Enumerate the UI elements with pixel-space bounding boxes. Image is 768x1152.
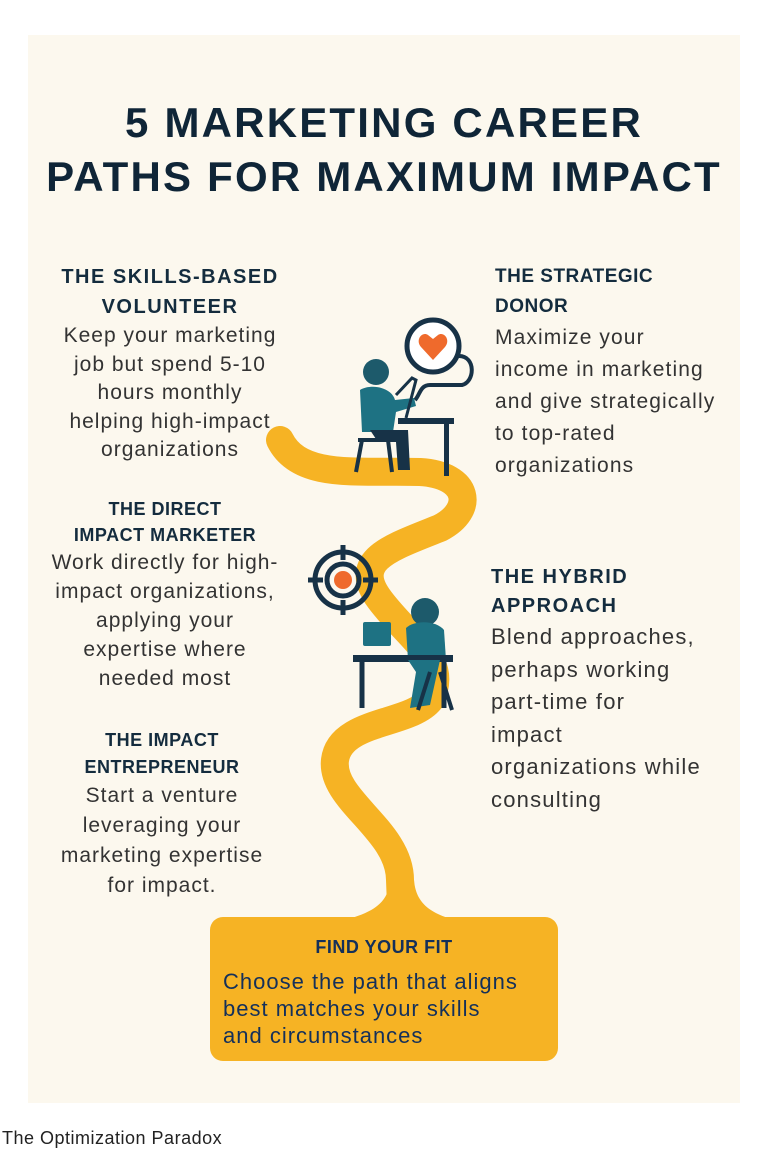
panel: strategic donor: Maximize your — [495, 326, 645, 349]
panel: impact entrepreneur: leveraging your — [83, 814, 241, 837]
panel: impact entrepreneur: for impact. — [107, 874, 217, 897]
winding path — [280, 440, 480, 930]
figure: man at desk — [356, 359, 454, 476]
panel: skills-based volunteer: helping high-impact — [69, 410, 271, 432]
panel: hybrid approach: Blend approaches, — [491, 624, 695, 649]
panel: strategic donor: to top-rated — [495, 422, 616, 445]
panel: hybrid approach: organizations while — [491, 754, 701, 779]
panel: strategic donor: THE STRATEGIC — [495, 266, 653, 287]
callout: find your fit: and circumstances — [223, 1023, 423, 1048]
panel: skills-based volunteer: hours monthly — [98, 381, 242, 404]
panel: direct impact marketer: impact organizations, — [55, 580, 275, 603]
panel: hybrid approach: perhaps working — [491, 656, 670, 682]
panel: strategic donor: organizations — [495, 454, 634, 477]
panel: hybrid approach: THE HYBRID — [491, 566, 628, 588]
panel: skills-based volunteer — [61, 266, 279, 461]
callout: find your fit — [210, 917, 558, 1061]
panel: direct impact marketer: IMPACT MARKETER — [74, 525, 256, 545]
callout: find your fit: Choose the path that aligns — [223, 969, 518, 994]
callout: find your fit: FIND YOUR FIT — [315, 937, 453, 957]
title — [46, 99, 722, 200]
panel: skills-based volunteer: job but spend 5-10 — [74, 352, 266, 376]
panel: strategic donor: income in marketing — [495, 358, 704, 381]
panel: impact entrepreneur: marketing expertise — [61, 844, 263, 867]
icon: heart speech bubble — [407, 320, 472, 400]
panel: hybrid approach: impact — [491, 722, 563, 746]
icon: target — [308, 545, 378, 615]
panel: impact entrepreneur — [61, 730, 263, 897]
panel: strategic donor: DONOR — [495, 296, 568, 317]
title: 5 MARKETING CAREER — [125, 99, 643, 146]
panel: hybrid approach: part-time for — [491, 689, 625, 714]
panel: direct impact marketer: applying your — [96, 609, 234, 632]
panel: direct impact marketer: Work directly for high- — [52, 551, 278, 574]
panel: skills-based volunteer: VOLUNTEER — [102, 296, 238, 318]
panel: hybrid approach: consulting — [491, 786, 602, 812]
panel: direct impact marketer: expertise where — [83, 638, 247, 661]
figure: woman at laptop — [353, 598, 453, 710]
panel: direct impact marketer: needed most — [99, 667, 231, 690]
panel: direct impact marketer: THE DIRECT — [108, 499, 222, 519]
panel: hybrid approach: APPROACH — [491, 595, 617, 617]
panel: skills-based volunteer: Keep your marketing — [64, 324, 276, 347]
title: PATHS FOR MAXIMUM IMPACT — [46, 153, 722, 200]
panel: strategic donor — [495, 266, 715, 477]
panel: impact entrepreneur: Start a venture — [86, 784, 238, 807]
callout: find your fit: best matches your skills — [223, 996, 481, 1021]
panel: strategic donor: and give strategically — [495, 390, 715, 413]
panel: skills-based volunteer: THE SKILLS-BASED — [61, 266, 279, 288]
panel: skills-based volunteer: organizations — [101, 438, 239, 461]
panel: hybrid approach — [491, 566, 701, 812]
footer caption: The Optimization Paradox — [2, 1128, 222, 1148]
panel: direct impact marketer — [52, 499, 278, 690]
panel: impact entrepreneur: THE IMPACT — [105, 730, 219, 750]
panel: impact entrepreneur: ENTREPRENEUR — [84, 757, 240, 777]
